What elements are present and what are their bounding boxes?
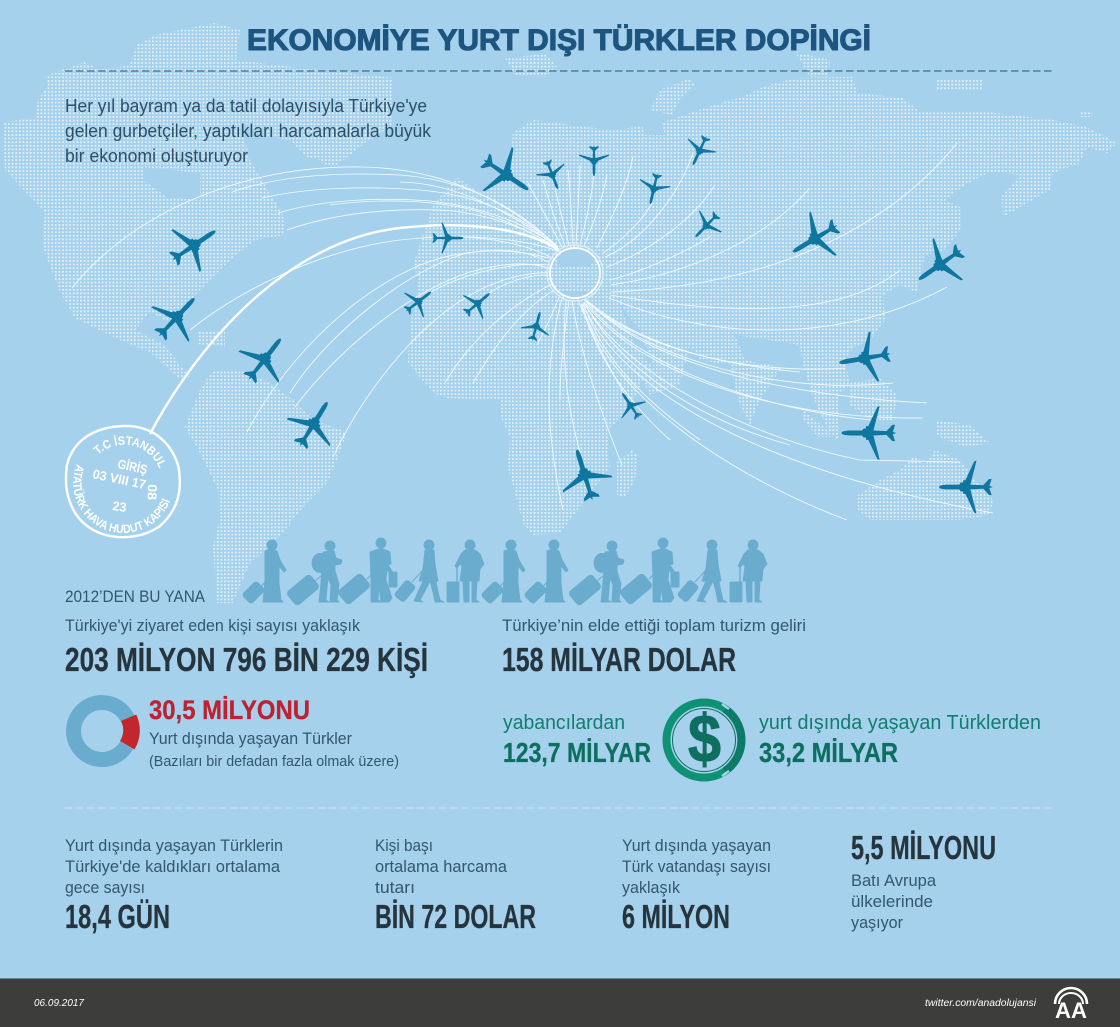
passport stamp: 03 VIII 17 bbox=[91, 466, 147, 492]
stat: nights: Türkiye'de kaldıkları ortalama bbox=[65, 857, 281, 876]
passport stamp: 08 bbox=[144, 484, 160, 500]
plane 20 bbox=[842, 406, 896, 460]
intro text: Her yıl bayram ya da tatil dolayısıyla Türkiye'ye bbox=[65, 96, 427, 116]
passport stamp bbox=[64, 424, 181, 538]
plane 3 bbox=[229, 323, 301, 395]
airplanes bbox=[140, 130, 993, 513]
plane 18 bbox=[904, 229, 976, 300]
main thick route to stamp bbox=[150, 225, 558, 434]
panel: tourism income: 33,2 MİLYAR bbox=[759, 737, 898, 768]
passengers row bbox=[242, 538, 767, 606]
panel: visitors: Yurt dışında yaşayan Türkler bbox=[149, 729, 352, 748]
plane 15 bbox=[610, 385, 651, 426]
panel: tourism income bbox=[502, 616, 1041, 778]
plane 6 bbox=[533, 155, 572, 194]
stat: citizens abroad: 6 MİLYON bbox=[622, 898, 730, 935]
stat: spending bbox=[375, 836, 536, 935]
stat: citizens abroad bbox=[622, 836, 771, 935]
plane 13 bbox=[455, 282, 500, 326]
stat: spending: tutarı bbox=[375, 878, 415, 897]
plane 11 bbox=[432, 222, 464, 254]
plane 8 bbox=[635, 170, 673, 208]
stat: nights: 18,4 GÜN bbox=[65, 898, 170, 935]
stat: western europe: yaşıyor bbox=[851, 913, 903, 932]
passenger 11 bbox=[730, 540, 767, 602]
panel: visitors: (Bazıları bir defadan fazla olmak üzere) bbox=[149, 753, 399, 770]
plane 2 bbox=[140, 281, 213, 353]
footer: twitter.com/anadolujansi bbox=[925, 998, 1037, 1009]
stat: western europe: 5,5 MİLYONU bbox=[851, 829, 996, 866]
footer bbox=[0, 978, 1120, 1027]
stat: nights: gece sayısı bbox=[65, 878, 145, 897]
plane 5 bbox=[469, 138, 543, 211]
passenger 4 bbox=[394, 540, 444, 603]
stat: citizens abroad: Yurt dışında yaşayan bbox=[622, 836, 771, 855]
passenger 5 bbox=[447, 540, 484, 602]
plane 10 bbox=[684, 203, 729, 248]
plane 9 bbox=[679, 130, 720, 172]
panel: tourism income: yabancılardan bbox=[503, 712, 625, 734]
stat: western europe: Batı Avrupa bbox=[851, 871, 937, 890]
plane 4 bbox=[278, 389, 349, 460]
panel: tourism income: yurt dışında yaşayan Türklerden bbox=[759, 712, 1041, 734]
passenger 7 bbox=[524, 540, 568, 604]
passport stamp: T.C İSTANBUL bbox=[92, 435, 165, 468]
icon: dollar coin bbox=[666, 701, 742, 778]
panel: visitors: Türkiye'yi ziyaret eden kişi sayısı yaklaşık bbox=[65, 616, 360, 635]
passport stamp: GİRİŞ bbox=[116, 456, 149, 477]
stat: citizens abroad: yaklaşık bbox=[622, 878, 680, 897]
plane 19 bbox=[835, 329, 895, 388]
passenger 10 bbox=[677, 540, 727, 603]
dotted world map bbox=[3, 23, 1117, 603]
stat: spending: Kişi başı bbox=[375, 836, 433, 855]
passenger 6 bbox=[481, 540, 525, 604]
stat: western europe bbox=[851, 829, 996, 932]
panel: visitors: 30,5 MİLYONU bbox=[149, 695, 310, 725]
footer: 06.09.2017 bbox=[34, 998, 84, 1009]
donut chart bbox=[66, 695, 140, 767]
ring: Turkey bbox=[547, 245, 603, 301]
water holes bbox=[143, 118, 803, 370]
logo: AA: AA bbox=[1055, 998, 1087, 1023]
icon: dollar coin: $ bbox=[688, 701, 721, 777]
plane 1 bbox=[158, 210, 230, 281]
stat: citizens abroad: Türk vatandaşı sayısı bbox=[622, 857, 771, 876]
stat: spending: ortalama harcama bbox=[375, 857, 508, 876]
passenger 3 bbox=[337, 538, 397, 605]
panel: tourism income: 158 MİLYAR DOLAR bbox=[502, 641, 736, 678]
panel: tourism income: Türkiye’nin elde ettiği toplam turizm geliri bbox=[502, 616, 806, 635]
stat: nights bbox=[65, 836, 283, 935]
passenger 9 bbox=[619, 538, 679, 605]
passenger 1 bbox=[242, 540, 286, 604]
plane 14 bbox=[518, 308, 554, 345]
intro text: gelen gurbetçiler, yaptıkları harcamalarla büyük bbox=[65, 121, 432, 141]
panel: visitors bbox=[65, 587, 428, 770]
stat: western europe: ülkelerinde bbox=[851, 892, 933, 911]
plane 12 bbox=[396, 280, 441, 324]
panel: visitors: 203 MİLYON 796 BİN 229 KİŞİ bbox=[65, 641, 428, 678]
plane 21 bbox=[939, 461, 993, 513]
panel: visitors: 2012’DEN BU YANA bbox=[65, 587, 206, 606]
intro text bbox=[65, 96, 432, 166]
plane 17 bbox=[780, 203, 850, 274]
plane 7 bbox=[579, 145, 609, 176]
flight route lines bbox=[72, 143, 993, 520]
passport stamp: ATATÜRK HAVA HUDUT KAPISI bbox=[73, 464, 170, 534]
stat: spending: BİN 72 DOLAR bbox=[375, 898, 536, 935]
intro text: bir ekonomi oluşturuyor bbox=[65, 146, 248, 166]
title: EKONOMİYE YURT DIŞI TÜRKLER DOPİNGİ bbox=[247, 24, 871, 57]
passenger 8 bbox=[568, 541, 624, 606]
passenger 2 bbox=[286, 541, 342, 606]
passport stamp: 23 bbox=[112, 498, 128, 515]
panel: tourism income: 123,7 MİLYAR bbox=[503, 737, 651, 768]
stat: nights: Yurt dışında yaşayan Türklerin bbox=[65, 836, 283, 855]
plane 16 bbox=[552, 442, 617, 508]
